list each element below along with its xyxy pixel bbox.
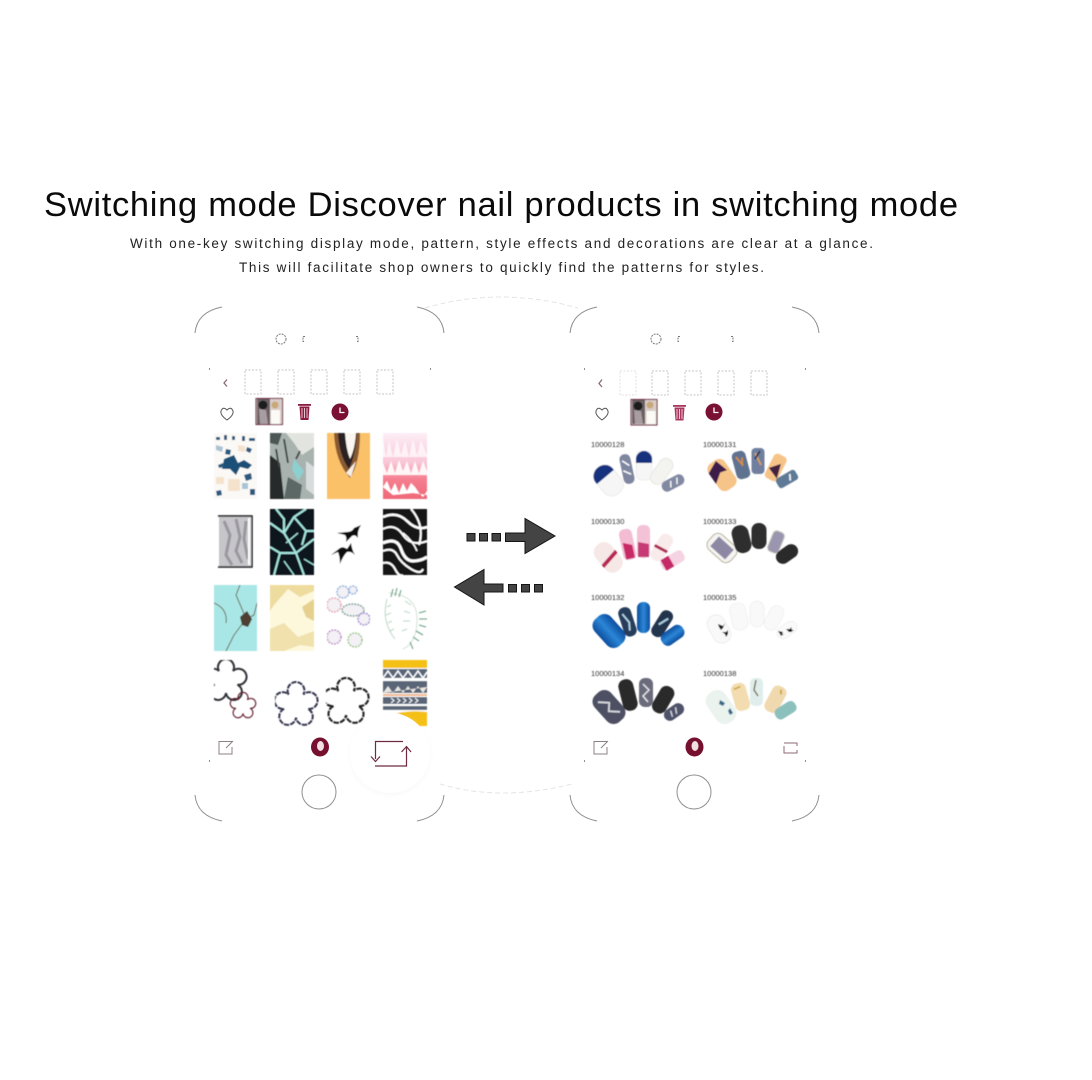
product 10000131 [703, 440, 799, 494]
connecting dotted arcs between phones [425, 297, 578, 793]
thumbnail: swallows [331, 524, 362, 564]
product 10000128: 10000128 [591, 440, 624, 449]
product 10000135: 10000135 [703, 593, 736, 602]
icon: trash [298, 404, 311, 420]
thumbnail: grey teal marble [269, 432, 314, 500]
icon: heart [221, 408, 233, 420]
thumbnail: yellow and navy tribal [382, 659, 428, 727]
subtitle text block [130, 236, 873, 275]
icon: clock [706, 404, 722, 420]
product 10000128 [589, 440, 686, 500]
camera and speaker [651, 334, 733, 344]
icon: avatar [256, 398, 282, 424]
icon: maroon brush button [686, 738, 704, 756]
thumbnail: pastel floral outline [326, 584, 371, 648]
phone outline corners [195, 307, 444, 821]
icon: edit [594, 741, 608, 754]
product 10000131: 10000131 [703, 440, 736, 449]
floating switch button [350, 713, 430, 795]
phone: pattern view [195, 307, 444, 821]
pattern thumbnail grid [205, 433, 427, 726]
subtitle text block: This will facilitate shop owners to quickly find the patterns for styles. [239, 260, 764, 275]
icon: maroon brush button [311, 738, 329, 756]
arrow: dashed right [467, 518, 555, 554]
bottom toolbar right phone [594, 738, 797, 809]
product 10000132 [589, 593, 687, 652]
icon: switch arrows [371, 742, 411, 766]
camera and speaker [276, 334, 358, 344]
home button [302, 775, 336, 809]
icon: edit [219, 741, 233, 754]
thumbnail: aqua marble [213, 584, 258, 652]
icon: avatar [631, 400, 657, 425]
product 10000138: 10000138 [703, 669, 736, 678]
product 10000134 [589, 669, 686, 728]
thumbnail: orange with dark u shape [326, 432, 371, 500]
thumbnail: cream and gold marble [270, 584, 315, 652]
thumbnail: pink gradient with white strokes [382, 433, 428, 500]
thumbnail: zebra swirl [382, 508, 428, 576]
nail product grid [589, 440, 801, 728]
back chevron [224, 380, 227, 386]
phone: nail product view [570, 307, 819, 821]
thumbnail: green feather [384, 588, 428, 650]
product 10000135 [703, 593, 799, 646]
tab placeholders [245, 370, 393, 394]
product 10000130 [590, 517, 686, 576]
thumbnail: blue patchwork [214, 434, 256, 498]
thumbnail: black flower outlines [213, 659, 258, 720]
product 10000134: 10000134 [591, 669, 624, 678]
subtitle text block: With one-key switching display mode, pattern, style effects and decorations are clear at a glance. [130, 236, 873, 251]
home button [677, 775, 711, 809]
product 10000138 [702, 669, 799, 728]
title: Switching mode Discover nail products in switching mode [44, 186, 958, 224]
icon: trash [673, 405, 686, 420]
icon: heart [596, 408, 608, 420]
product 10000130: 10000130 [591, 517, 624, 526]
phone outline corners [570, 307, 819, 821]
tab placeholders [620, 371, 767, 395]
product 10000133 [703, 517, 801, 567]
thumbnail: navy flower outline [274, 680, 320, 727]
product 10000132: 10000132 [591, 593, 624, 602]
bottom toolbar left phone [219, 738, 336, 809]
thumbnail: black marble with aqua veins [269, 508, 315, 576]
icon: clock [332, 404, 348, 420]
product 10000133: 10000133 [703, 517, 736, 526]
thumbnail: grey stamp [217, 514, 254, 569]
icon: small switch [784, 743, 797, 753]
thumbnail: black flower outline [325, 676, 370, 725]
back chevron [599, 380, 602, 387]
arrow: dashed left [454, 570, 542, 605]
